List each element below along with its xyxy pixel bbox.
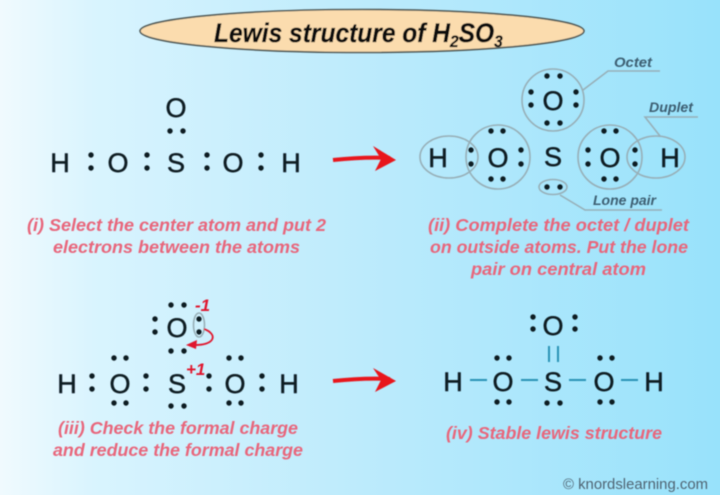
caption: step ii: (ii) Complete the octet / duplet xyxy=(428,215,690,235)
caption: step iii: (iii) Check the formal charge xyxy=(58,418,298,438)
title: Lewis structure of H xyxy=(214,19,450,48)
caption: step ii: pair on central atom xyxy=(470,259,646,279)
panel: step iv structure: S xyxy=(544,367,562,397)
arrow: step iii to iv xyxy=(333,368,396,392)
caption: step ii: on outside atoms. Put the lone xyxy=(430,237,688,257)
footer credit: © knordslearning.com xyxy=(563,476,708,493)
title: 2 xyxy=(449,32,459,51)
panel: step i structure xyxy=(50,93,301,178)
title ellipse xyxy=(140,10,584,52)
panel: step i structure: S xyxy=(167,148,185,178)
panel: step ii structure: O xyxy=(542,86,564,116)
panel: step iv structure: H xyxy=(443,367,463,397)
panel: step iii structure: O xyxy=(224,369,246,399)
panel: step iii structure xyxy=(57,296,299,409)
label: octet: Octet xyxy=(614,54,653,70)
label: lone pair: Lone pair xyxy=(593,192,658,208)
panel: step ii structure: O xyxy=(599,143,621,173)
panel: step iv structure xyxy=(443,311,664,406)
formal charge -1: -1 xyxy=(195,296,210,315)
panel: step iii structure: H xyxy=(279,369,299,399)
panel: step iv structure: O xyxy=(593,367,615,397)
caption: step i xyxy=(27,215,326,257)
label: octet xyxy=(583,54,660,90)
label: duplet: Duplet xyxy=(649,99,694,115)
arrow: step i to ii xyxy=(333,146,396,171)
highlight ellipse xyxy=(194,313,204,337)
caption: step iii xyxy=(53,418,303,460)
octet circles xyxy=(420,69,685,194)
panel: step iii structure: H xyxy=(57,369,77,399)
caption: step i: (i) Select the center atom and put 2 xyxy=(27,215,326,235)
panel: step iii structure: O xyxy=(109,369,131,399)
panel: step i structure: O xyxy=(107,148,129,178)
bonds xyxy=(470,346,638,380)
panel: step iii structure: O xyxy=(166,313,188,343)
caption: step i: electrons between the atoms xyxy=(53,237,300,257)
panel: step iii structure: S xyxy=(168,369,186,399)
panel: step ii structure: O xyxy=(487,143,509,173)
caption: step iii: and reduce the formal charge xyxy=(53,440,303,460)
panel: step i structure: O xyxy=(222,148,244,178)
title banner xyxy=(140,10,584,52)
panel: step iv structure: O xyxy=(542,311,564,341)
panel: step ii structure: S xyxy=(544,142,562,172)
caption: step iv: (iv) Stable lewis structure xyxy=(446,423,662,443)
caption: step ii xyxy=(428,215,690,279)
panel: step iv structure: O xyxy=(492,367,514,397)
panel: step i structure: H xyxy=(50,148,70,178)
title: SO xyxy=(459,19,494,48)
panel: step ii structure xyxy=(420,54,698,210)
panel: step ii structure: H xyxy=(660,143,680,173)
title: 3 xyxy=(494,32,503,51)
panel: step i structure: H xyxy=(281,148,301,178)
panel: step iv structure: H xyxy=(644,367,664,397)
curved electron arrow xyxy=(186,329,213,349)
label: lone pair xyxy=(560,192,662,210)
formal charge +1: +1 xyxy=(186,360,205,379)
label: duplet xyxy=(645,99,698,136)
panel: step i structure: O xyxy=(165,93,187,123)
panel: step ii structure: H xyxy=(428,143,448,173)
